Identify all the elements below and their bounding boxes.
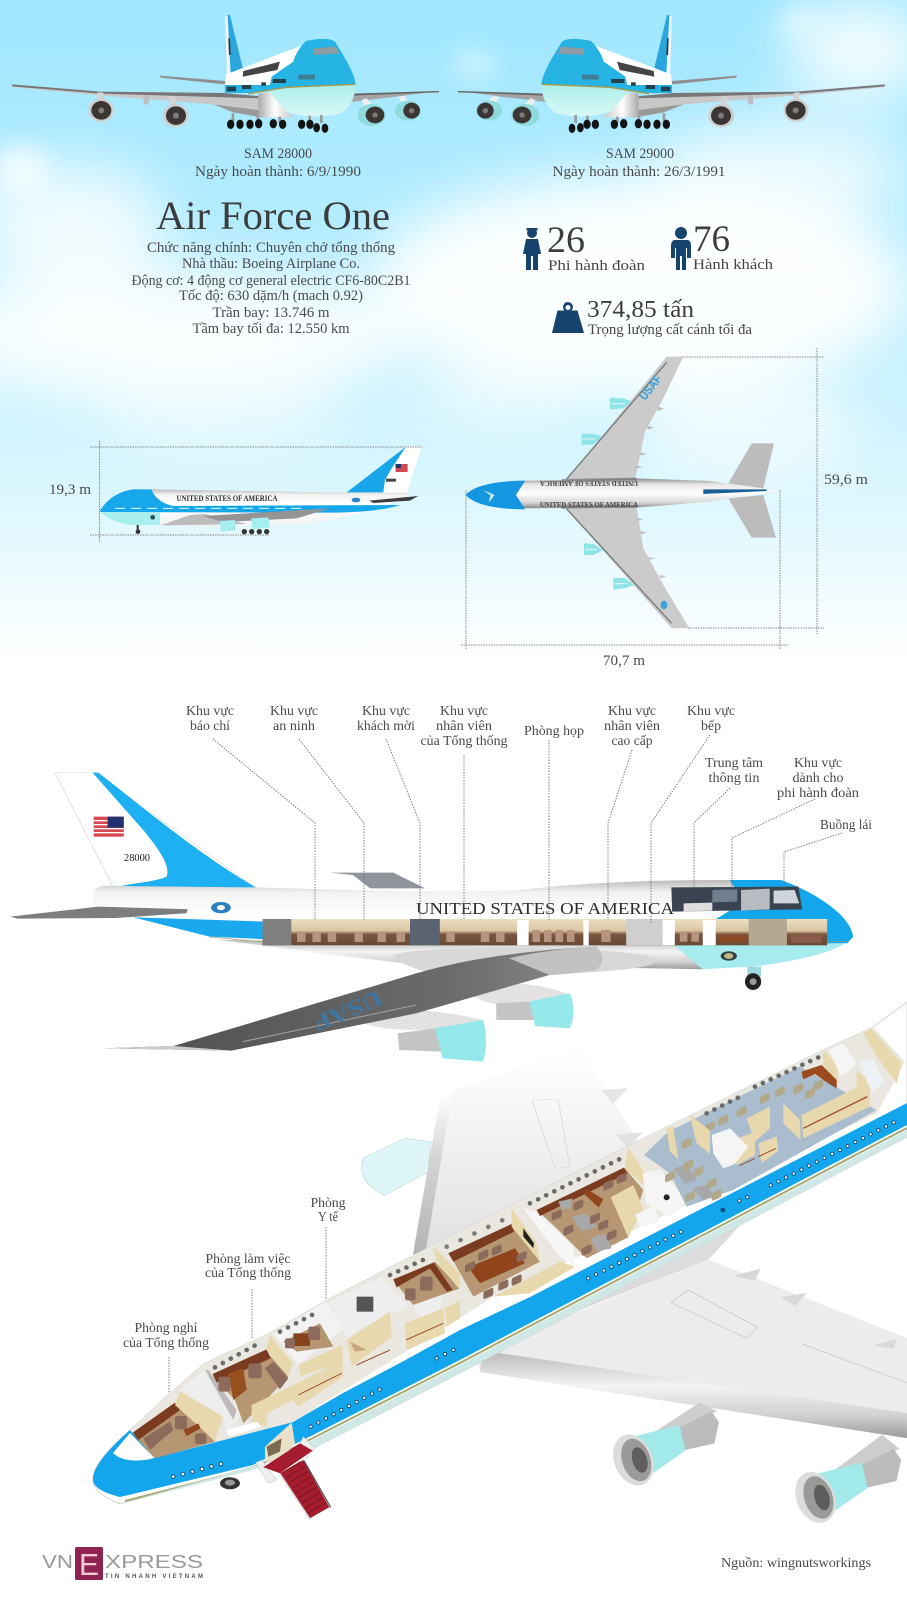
- tail number: 28000: [124, 852, 150, 864]
- medical room: [273, 1301, 343, 1376]
- stat: passengers: Hành khách: [693, 257, 774, 273]
- stat: passengers: 76: [693, 219, 730, 260]
- guest area floor: [644, 1067, 877, 1207]
- callout: president's staff: Khu vực: [440, 703, 488, 718]
- callout: president's suite: của Tổng thống: [123, 1335, 209, 1350]
- near wing and engines: [399, 1219, 907, 1525]
- caption: SAM 29000: SAM 29000: [606, 146, 674, 162]
- callout: cockpit: [784, 817, 872, 888]
- sky background with clouds: [0, 0, 907, 660]
- stat: takeoff weight: 374,85 tấn: [587, 297, 694, 323]
- logo: VnExpress: TIN NHANH VIETNAM: [105, 1574, 203, 1580]
- isometric cutaway airplane: [93, 1002, 907, 1525]
- logo: VnExpress: E: [79, 1547, 99, 1582]
- callout: galley: Khu vực: [687, 703, 735, 718]
- belly fairing: [399, 1219, 746, 1397]
- icon: weight: [552, 302, 584, 333]
- top view airplane with wingspan and length dimensions: [461, 348, 869, 669]
- cabin interior base: [130, 1027, 905, 1458]
- stat: takeoff weight: Trọng lượng cất cánh tối đa: [588, 322, 753, 338]
- caption: SAM 28000: [195, 146, 361, 180]
- side cutaway airplane: [10, 773, 853, 1062]
- stat: passengers: [671, 219, 774, 273]
- crew corner table: [802, 1065, 837, 1088]
- callout: president's office: [205, 1251, 291, 1338]
- specifications text block: Trần bay: 13.746 m: [212, 305, 330, 321]
- rooms: tail section: [447, 1028, 902, 1300]
- staff room: [393, 1247, 460, 1350]
- callout: press: [186, 703, 315, 920]
- source note: Nguồn: wingnutsworkings: [721, 1556, 871, 1571]
- callout: president's office: của Tổng thống: [205, 1265, 291, 1280]
- callout: security: an ninh: [273, 718, 315, 733]
- roundel and interior windows: [263, 887, 827, 945]
- stat: takeoff weight: [552, 297, 753, 338]
- presidential suite: [133, 1392, 223, 1458]
- dimension lines: [461, 348, 824, 650]
- callout: president's office: Phòng làm việc: [206, 1251, 290, 1266]
- logo: VnExpress: VN: [42, 1552, 73, 1572]
- specifications text block: Tầm bay tối đa: 12.550 km: [192, 321, 350, 337]
- callout: press: báo chí: [190, 718, 230, 733]
- stat: crew: 26: [547, 220, 585, 261]
- callout: guests: [357, 703, 420, 920]
- rooms: nose section: [133, 1247, 460, 1519]
- callout: medical room: [310, 1195, 346, 1299]
- icon: pilot: [523, 228, 541, 270]
- title: Air Force One: [156, 193, 390, 238]
- callout: president's staff: của Tổng thống: [420, 733, 508, 748]
- label: length: 70,7 m: [603, 653, 646, 669]
- text: mirrored fuselage lettering: UNITED STATES OF AMERICA: [540, 479, 638, 487]
- tailplane: [10, 907, 188, 919]
- far tailplane: [330, 873, 425, 888]
- callout: president's suite: [123, 1320, 209, 1393]
- far wing and engine: [362, 1047, 643, 1254]
- caption: SAM 28000: Ngày hoàn thành: 6/9/1990: [195, 164, 361, 180]
- airplane front view: SAM 28000: [12, 15, 439, 133]
- near wing: [479, 1260, 907, 1438]
- icon: passenger: [671, 227, 691, 270]
- callout: senior staff: nhân viên: [604, 718, 660, 733]
- callout: medical room: Y tế: [318, 1209, 339, 1224]
- callout: medical room: Phòng: [310, 1195, 346, 1210]
- callout: communications center: [694, 755, 764, 887]
- lavatory and utility box: [712, 1128, 748, 1168]
- callout: guests: khách mời: [357, 718, 415, 733]
- callout: communications center: Trung tâm: [705, 755, 764, 770]
- caption: SAM 29000: [552, 146, 726, 180]
- red stairs: [256, 1437, 331, 1519]
- window rows: nose section: [173, 1258, 457, 1477]
- specifications text block: Động cơ: 4 động cơ general electric CF6-80C2B1: [132, 273, 410, 289]
- fuselage shell: [93, 1002, 907, 1504]
- stat: crew: Phi hành đoàn: [548, 258, 646, 274]
- callout: crew area: dành cho: [792, 770, 844, 785]
- galley and stairs: [330, 1277, 408, 1367]
- height dimension lines: [90, 441, 422, 542]
- callout: president's staff: nhân viên: [436, 718, 492, 733]
- callout: senior staff: Khu vực: [608, 703, 656, 718]
- callout: crew area: phi hành đoàn: [777, 785, 859, 800]
- specifications text block: Chức năng chính: Chuyên chở tổng thống: [147, 240, 395, 256]
- fuselage: [93, 880, 853, 967]
- white office: [635, 1169, 687, 1227]
- callout: press: Khu vực: [186, 703, 234, 718]
- logo: VnExpress: [42, 1547, 203, 1582]
- front door: [265, 1423, 295, 1462]
- callout: crew area: [732, 755, 859, 888]
- callout: president's staff: [420, 703, 508, 920]
- specifications text block: Nhà thầu: Boeing Airplane Co.: [182, 256, 360, 272]
- callout: communications center: thông tin: [708, 770, 760, 785]
- blue fuselage band: [93, 1103, 907, 1497]
- caption: SAM 28000: SAM 28000: [244, 146, 312, 162]
- text: fuselage lettering: UNITED STATES OF AMERICA: [176, 494, 278, 503]
- callout: senior staff: [604, 703, 660, 920]
- lounge: [537, 1147, 644, 1258]
- text: fuselage lettering: UNITED STATES OF AMERICA: [540, 501, 638, 509]
- side view airplane with height dimension: [49, 441, 422, 542]
- airplane front view: SAM 29000: [458, 15, 885, 133]
- text: USAF on wing: USAF: [310, 985, 386, 1036]
- label: height: 19,3 m: [49, 482, 92, 498]
- label: wingspan: 59,6 m: [824, 472, 869, 488]
- nose gear: [745, 967, 761, 990]
- callout: senior staff: cao cấp: [612, 733, 653, 748]
- window rows: [447, 1057, 896, 1278]
- windshield cutout: [113, 1433, 154, 1461]
- callout: conference room: Phòng họp: [524, 723, 584, 738]
- callouts: cutaway rooms: [123, 1195, 346, 1393]
- logo: VnExpress: XPRESS: [105, 1552, 203, 1572]
- callout: cockpit: Buồng lái: [820, 817, 872, 832]
- callouts: side cutaway zones: [186, 703, 872, 923]
- engine 1: [608, 1402, 719, 1487]
- callout: galley: bếp: [701, 718, 721, 733]
- corridor panels: [227, 1361, 343, 1437]
- specifications text block: [132, 240, 410, 337]
- callout: president's suite: Phòng nghỉ: [134, 1320, 198, 1335]
- text: USAF on wing: USAF: [636, 372, 665, 403]
- callout: security: [270, 703, 364, 920]
- presidential office: [213, 1335, 293, 1423]
- callout: guests: Khu vực: [362, 703, 410, 718]
- partitions: [667, 1028, 902, 1165]
- conference room: [448, 1208, 540, 1300]
- caption: SAM 29000: Ngày hoàn thành: 26/3/1991: [552, 164, 726, 180]
- callout: galley: [651, 703, 735, 923]
- callout: security: Khu vực: [270, 703, 318, 718]
- text: UNITED STATES OF AMERICA: UNITED STATES OF AMERICA: [416, 899, 675, 918]
- specifications text block: Tốc độ: 630 dặm/h (mach 0.92): [179, 288, 363, 304]
- wing: [104, 947, 602, 1051]
- engine: outer: [364, 1010, 486, 1062]
- tail fin: [55, 773, 257, 888]
- engine 2: [790, 1435, 901, 1525]
- engine: inner: [467, 984, 573, 1028]
- callout: crew area: Khu vực: [794, 755, 842, 770]
- stat: crew: [523, 220, 646, 274]
- nose gear: [220, 1477, 240, 1489]
